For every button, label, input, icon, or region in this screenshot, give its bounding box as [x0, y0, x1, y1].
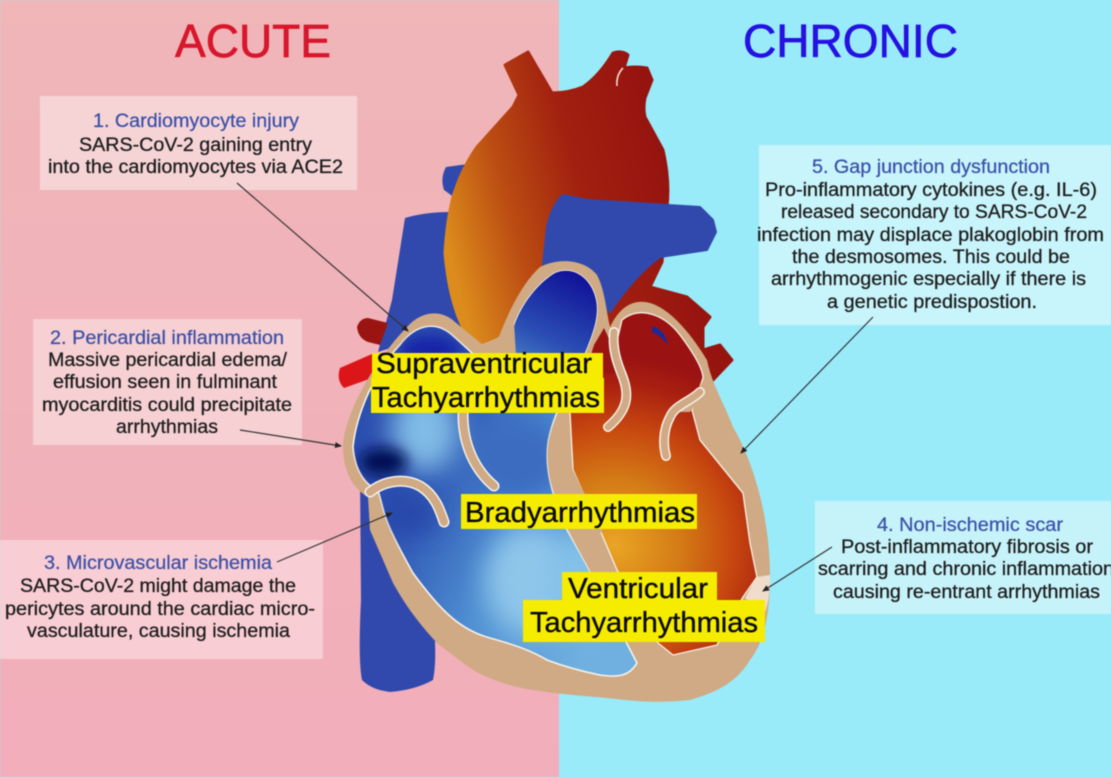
red gap between outflow tract and left atrium: [585, 328, 620, 374]
title: chronic: CHRONIC: [743, 15, 958, 67]
text box 5: gap junction dysfunction: the desmosomes. This could be: [792, 246, 1070, 268]
title: acute: ACUTE: [175, 15, 331, 67]
panel: chronic background: [559, 0, 1111, 777]
aorta branch slit: [617, 68, 623, 86]
text box 1: cardiomyocyte injury: SARS-CoV-2 gaining entry: [79, 134, 312, 156]
label: ventricular tachyarrhythmias: Ventricular: [568, 573, 709, 605]
text box 4: non-ischemic scar: causing re-entrant arrhythmias: [833, 581, 1100, 603]
text box 3: microvascular ischemia: 3. Microvascular ischemia: [44, 552, 272, 574]
aorta: [445, 52, 732, 420]
label: supraventricular tachyarrhythmias: Supraventricular: [376, 348, 593, 380]
text box 5: gap junction dysfunction: infection may displace plakoglobin from: [757, 224, 1104, 246]
label: bradyarrhythmias: Bradyarrhythmias: [465, 497, 695, 529]
inferior vena cava: [360, 470, 440, 692]
arrow: box 1 to wall: [237, 183, 408, 331]
text box 1: cardiomyocyte injury: [40, 96, 357, 190]
text box 1: cardiomyocyte injury: 1. Cardiomyocyte injury: [93, 110, 299, 132]
text box 4: non-ischemic scar: [815, 501, 1111, 614]
arrow: box 4 to scar: [763, 547, 832, 591]
label: supraventricular tachyarrhythmias: [371, 348, 604, 414]
text box 1: cardiomyocyte injury: into the cardiomyocytes via ACE2: [48, 156, 343, 178]
pulmonary vessel left: [357, 318, 388, 345]
text box 5: gap junction dysfunction: released secondary to SARS-CoV-2: [781, 201, 1087, 223]
wall between right atrium and outflow tract: [470, 322, 516, 356]
heart muscle wall: [343, 261, 770, 702]
scar region: [745, 575, 770, 612]
text box 5: gap junction dysfunction: 5. Gap junction dysfunction: [812, 156, 1050, 178]
text box 5: gap junction dysfunction: arrhythmogenic especially if there is: [771, 268, 1086, 290]
panel: acute background: [0, 0, 559, 777]
illustration: heart: [339, 52, 770, 702]
valve leaflets: [370, 332, 700, 530]
text box 4: non-ischemic scar: Post-inflammatory fibrosis or: [841, 536, 1093, 558]
text box 2: pericardial inflammation: Massive pericardial edema/: [48, 349, 288, 371]
text box 2: pericardial inflammation: [33, 319, 302, 445]
label: ventricular tachyarrhythmias: [523, 572, 765, 642]
arrow: box 2 to pericardium: [240, 430, 341, 446]
wedge: left atrial wall: [672, 375, 706, 412]
text box 3: microvascular ischemia: [0, 540, 323, 659]
text box 5: gap junction dysfunction: [757, 145, 1111, 325]
text box 4: non-ischemic scar: scarring and chronic inflammation: [818, 558, 1111, 580]
text box 3: microvascular ischemia: pericytes around the cardiac micro-: [5, 598, 315, 620]
label: supraventricular tachyarrhythmias: Tachyarrhythmias: [372, 382, 600, 414]
label: ventricular tachyarrhythmias: Tachyarrhythmias: [530, 607, 758, 639]
small dark mark in left atrium: [652, 326, 668, 345]
small vein top left: [442, 164, 468, 198]
arrow: box 3 to myocardium: [277, 513, 392, 562]
superior vena cava: [378, 212, 470, 352]
bright red vessel left: [339, 354, 372, 388]
pulmonary artery: [543, 195, 716, 312]
text box 4: non-ischemic scar: 4. Non-ischemic scar: [877, 514, 1063, 536]
text box 5: gap junction dysfunction: Pro-inflammatory cytokines (e.g. IL-6): [765, 179, 1097, 201]
text box 3: microvascular ischemia: vasculature, causing ischemia: [27, 620, 290, 642]
arrow: box 5 to wall: [741, 317, 873, 453]
text box 3: microvascular ischemia: SARS-CoV-2 might damage the: [20, 575, 296, 597]
text box 2: pericardial inflammation: effusion seen in fulminant: [53, 371, 278, 393]
right heart chamber: [353, 260, 637, 676]
text box 2: pericardial inflammation: arrhythmias: [116, 416, 218, 438]
text box 5: gap junction dysfunction: a genetic predispostion.: [827, 291, 1037, 313]
text box 2: pericardial inflammation: myocarditis could precipitate: [42, 394, 292, 416]
text box 2: pericardial inflammation: 2. Pericardial inflammation: [50, 327, 284, 349]
left heart chamber: [570, 313, 757, 655]
